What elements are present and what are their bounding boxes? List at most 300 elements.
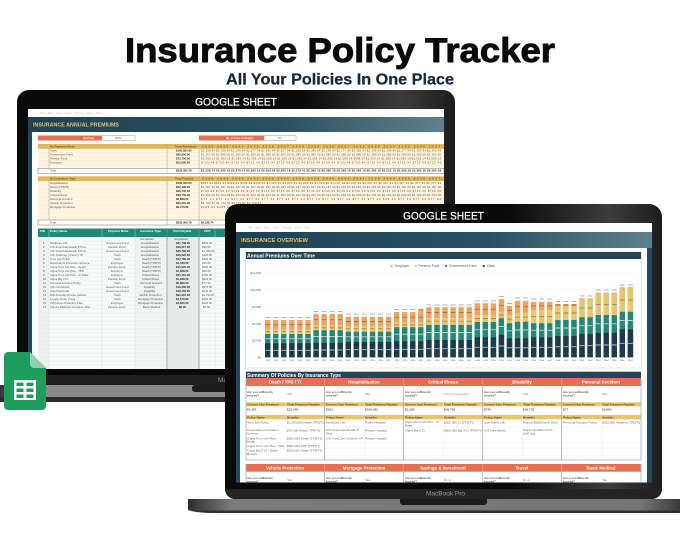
summary row one: policy list: $70,000 Death (TPD/TI) xyxy=(287,428,320,432)
table: policy list: $96.00 xyxy=(202,245,211,249)
summary row two: insured question: insured? xyxy=(563,480,575,484)
y axis labels: $12,500 xyxy=(251,271,261,275)
summary row two: insured question: insured? xyxy=(326,480,338,484)
summary row one: policy list: Cigna Term Life Plus - TPD xyxy=(247,444,285,448)
summary row one: policy list: Cigna Big 3 CI - Death xyxy=(247,448,278,452)
summary row one: premiums: $745 xyxy=(484,408,491,412)
table: by insurance type: Critical Illness xyxy=(50,193,68,197)
table: policy list: Government Fund xyxy=(106,289,129,293)
table: policy list: Government Fund xyxy=(106,249,129,253)
summary row one: insured question xyxy=(247,391,607,396)
summary row one: insured question: insured? xyxy=(484,394,496,398)
table: policy list: $1,080.00 xyxy=(202,249,215,253)
summary row one: premiums: $1,187 xyxy=(247,408,257,412)
start year control xyxy=(38,136,135,140)
x axis year labels: 2049 xyxy=(483,360,489,362)
table: policy list: S/N xyxy=(40,229,45,233)
table: by insurance type: Disability xyxy=(50,189,62,193)
summary row one: premiums: $100,036 xyxy=(365,408,378,412)
sheet header: INSURANCE ANNUAL PREMIUMS xyxy=(33,122,119,128)
summary row one: policy list: CIS SuperCareHealth P xyxy=(326,428,359,432)
summary row two: insured question: insured? xyxy=(484,480,496,484)
table: policy list: 11 xyxy=(43,281,46,285)
x axis year labels: 2046 xyxy=(459,360,464,362)
table: policy list: $77.44 xyxy=(202,281,211,285)
table: policy list: 15 xyxy=(43,297,47,301)
table: policy list: Critical Illness xyxy=(142,273,160,277)
chart legend: Pension Fund xyxy=(418,264,440,268)
summary row one: policy list: Term Life Policy xyxy=(247,420,269,424)
y axis labels: $2,500 xyxy=(252,338,261,342)
table: policy list: 3 xyxy=(43,249,45,253)
summary row one: policy list: $1,000,000 Death (TPD/TI) xyxy=(287,420,324,424)
start year control: 2022 xyxy=(115,136,122,140)
chart heading xyxy=(246,252,641,260)
table: policy list: Personal Accident xyxy=(140,281,163,285)
summary row one: policy list: Policy Name xyxy=(405,415,423,419)
summary row one: coral headers xyxy=(246,378,641,386)
table: policy list: Pension Fund xyxy=(108,277,126,281)
laptop: insurance overview sheet xyxy=(188,204,680,513)
summary row two: insured question: Are you sufficiently xyxy=(484,476,510,480)
x axis year labels: 2062 xyxy=(588,360,593,362)
table: policy list: Pension Fund xyxy=(108,245,126,249)
overview header xyxy=(236,232,652,483)
summary row one: policy list: CIS TotalCare (Citizen) YP xyxy=(326,436,363,440)
summary row one: policy list: Benefits xyxy=(287,415,299,419)
summary row one: coral headers: Hospitalisation xyxy=(348,380,380,385)
summary row one: policy list: Cigna Term Life Plus - xyxy=(247,436,277,440)
table: policy list: 2 xyxy=(43,245,45,249)
table: policy list: Basic Medical xyxy=(143,305,161,309)
table: by insurance type: Mortgage Protection xyxy=(50,205,76,209)
table: policy list: $4,289.00 xyxy=(176,277,189,281)
x axis year labels: 2064 xyxy=(604,360,609,362)
laptop bezel (rear) xyxy=(17,90,455,385)
summary row two: coral headers: Basic Medical xyxy=(586,465,616,470)
table: policy list: CIS Home Protection Plan xyxy=(50,301,83,305)
summary row one: policy list: Benefits xyxy=(365,415,377,419)
x axis year labels: 2022 xyxy=(265,360,271,362)
x axis year labels: 2032 xyxy=(346,360,352,362)
summary row one: policy list: Payout $600/month (Life) xyxy=(523,420,558,424)
x axis year labels: 2065 xyxy=(612,360,618,362)
table: policy list: 1 xyxy=(43,241,45,245)
table: policy list: Mortgage Protection xyxy=(138,297,164,301)
laptop brand (rear): MacBook Pro xyxy=(218,377,257,384)
summary row one: policy list xyxy=(246,415,641,456)
summary row two: insured question: Yes xyxy=(287,478,292,482)
table: by insurance type: $1,204.00 $1,204.00 $1,204.00 $1,204.00 $1,204.00 $1,204.00 $1,204.00 $1,204.00 $1,204.00 $1,204.00 $1,204.00 $1,204.00 $1,204.00 $1,204.00 $1,204.00 $1,204.00 xyxy=(201,193,441,197)
start year control: Start Year xyxy=(83,137,95,140)
table: policy list: Employer xyxy=(111,269,123,273)
bar data labels: dark bands xyxy=(265,300,633,332)
table: by insurance type: $2,890.00 xyxy=(176,197,189,201)
table: policy list: 5 xyxy=(43,257,45,261)
table: by payment mode: Government Fund xyxy=(50,152,73,156)
table: by payment mode: 2022 2023 2024 2025 2026 2027 2028 2029 2030 2031 2032 2033 2034 2035 2036 2037 xyxy=(202,144,440,148)
x axis year labels: 2047 xyxy=(467,360,472,362)
summary row two: coral headers: Savings & Investment xyxy=(420,465,466,470)
summary row two: insured question xyxy=(247,477,607,482)
summary row one: premiums: Total Premium Payable xyxy=(602,402,635,406)
summary row one: insured question: Are you sufficiently xyxy=(563,390,589,394)
x axis year labels: 2025 xyxy=(289,360,295,362)
chart legend xyxy=(390,264,495,268)
bezel label: Google Sheet: GOOGLE SHEET xyxy=(403,210,484,222)
table: by payment mode: $5,228.74 $5,360.18 $5,279.41 $5,360.18 $5,259.48 $5,260.18 $5,279.41 $5,360.18 $5,360.18 $5,360.18 $5,360.18 $5,360.18 $5,222.18 $5,360.18 $5,360.18 $5,360.18 xyxy=(201,169,441,173)
table: policy list: $12,780.00 xyxy=(176,257,190,261)
x axis year labels: 2023 xyxy=(273,360,279,362)
summary row one: premiums: $39,750 xyxy=(444,408,455,412)
summary row one: policy list: Benefits xyxy=(602,415,614,419)
table: policy list: Annualised xyxy=(174,237,188,241)
summary row one: coral headers: Personal Accident xyxy=(582,380,621,385)
x axis year labels: 2045 xyxy=(451,360,456,362)
summary row two: coral headers: Vehicle Protection xyxy=(266,465,304,470)
summary heading: Summary Of Policies By Insurance Type xyxy=(247,373,341,379)
table: by payment mode: Pension Fund xyxy=(50,156,68,160)
table: policy list: $0.00 xyxy=(179,305,186,309)
summary row one: insured question: Can be Increased xyxy=(444,392,469,396)
summary row one: policy list: MediCare Life xyxy=(326,420,346,424)
table: by insurance type: $745.00 $745.00 $745.00 $745.00 $745.00 $745.00 $745.00 $745.00 $745.00 $745.00 $745.00 $745.00 $745.00 $745.00 $745.00 $745.00 xyxy=(201,189,441,193)
table: by insurance type: $90,210.00 xyxy=(176,201,190,205)
x axis year labels: 2026 xyxy=(297,360,303,362)
table: policy list: $15,020.00 xyxy=(176,265,190,269)
summary row one: policy list: Dependants Protection xyxy=(247,428,279,432)
x axis year labels: 2053 xyxy=(515,360,521,362)
table: policy list: Payment Mode xyxy=(108,229,129,233)
table: by payment mode: $332,056.78 xyxy=(176,169,192,173)
summary row one: policy list: Policy Name xyxy=(563,415,581,419)
table: policy list: $4,800.00 xyxy=(176,301,189,305)
table: policy list: Disability xyxy=(144,285,156,289)
summary row one: insured question: insured? xyxy=(563,394,575,398)
bezel label: Google Sheet: GOOGLE SHEET xyxy=(195,96,277,108)
table: policy list: $370.00 xyxy=(202,289,213,293)
summary row one: policy list: Private Hospital xyxy=(365,436,387,440)
summary row one: insured question: Yes xyxy=(287,392,292,396)
x axis year labels: 2038 xyxy=(394,360,400,362)
laptop bezel (front) xyxy=(225,204,662,499)
x axis year labels: 2057 xyxy=(547,360,553,362)
summary row one: policy list: Benefits xyxy=(444,415,456,419)
table: by insurance type: $39,750.00 xyxy=(176,193,190,197)
summary row two: insured question: Are you sufficiently xyxy=(563,476,589,480)
table: policy list: 6 xyxy=(43,261,45,265)
bar totals xyxy=(265,285,633,318)
summary row one: policy list: $500,000 TPD (TPD/TI) xyxy=(287,444,320,448)
x axis year labels: 2058 xyxy=(555,360,561,362)
x axis year labels: 2029 xyxy=(322,360,327,362)
y axis labels: $5,000 xyxy=(252,322,261,326)
table: by payment mode: Employer xyxy=(50,160,62,164)
summary row one: premiums: Current Year Premium xyxy=(563,402,595,406)
x axis year labels: 2051 xyxy=(499,360,505,362)
table: by insurance type: Total Payable xyxy=(175,177,194,181)
chart legend: Government Fund xyxy=(449,264,476,268)
table: by insurance type: Vehicle Protection xyxy=(50,201,73,205)
x axis year labels: 2042 xyxy=(426,360,432,362)
table: policy list: CareShield Life xyxy=(50,289,70,293)
sheet body panel xyxy=(32,132,444,369)
overview header: INSURANCE OVERVIEW xyxy=(241,238,309,244)
table: by payment mode: $73,750.50 xyxy=(176,156,190,160)
table: policy list: Death (TPD/TI) xyxy=(142,265,161,269)
x axis year labels: 2041 xyxy=(418,360,424,362)
summary row one: premiums: Total Premium Payable xyxy=(287,402,320,406)
summary row one: insured question: insured? xyxy=(326,394,338,398)
table: policy list: Hospitalisation xyxy=(141,245,160,249)
table: policy list: $1,608.00 xyxy=(176,269,189,273)
summary row one: premiums: Total Premium Payable xyxy=(523,402,556,406)
years display control xyxy=(199,136,296,140)
summary heading xyxy=(246,372,641,378)
table: policy list: Insurance Type xyxy=(140,229,161,233)
summary row one: policy list: Policy Name xyxy=(484,415,502,419)
table: by insurance type: $100,036.00 xyxy=(176,181,192,185)
table: policy list: MediCare Life xyxy=(50,241,68,245)
summary row one: policy list: Rider xyxy=(405,424,412,428)
summary row two: insured question: insured? xyxy=(247,480,259,484)
x axis year labels: 2054 xyxy=(523,360,529,362)
table: by insurance type: Death (TPD/TI) xyxy=(50,185,69,189)
table: policy list: $195.00 xyxy=(202,253,213,257)
table: policy list: Cigna Term Life Plus - Death xyxy=(50,265,86,269)
table: by payment mode: By Payment Mode xyxy=(50,144,75,148)
summary row one: coral headers: Death / TPD / TI xyxy=(269,380,301,385)
summary row one: premiums: Current Year Premium xyxy=(326,402,358,406)
table: policy list: 12 xyxy=(43,285,47,289)
x axis year labels: 2037 xyxy=(386,360,392,362)
years display control: 16 xyxy=(278,136,282,140)
summary row one: insured question: Are you sufficiently xyxy=(405,390,431,394)
x axis year labels: 2061 xyxy=(580,360,585,362)
table: policy list: Personal Accident Policy xyxy=(50,281,81,285)
summary row two: insured question: N / A xyxy=(444,478,452,482)
table: policy list: Death (TPD/TI) xyxy=(142,257,161,261)
summary row one: premiums: $2,890 xyxy=(602,408,612,412)
table: by payment mode xyxy=(38,144,444,173)
panel: annual premiums chart xyxy=(246,252,642,368)
laptop: annual premiums sheet xyxy=(0,90,455,402)
sheet header xyxy=(28,117,444,369)
table: policy list: 8 xyxy=(43,269,45,273)
table: by insurance type: $332,056.78 xyxy=(176,220,192,224)
table: policy list: $1,722.87 xyxy=(202,293,215,297)
table: policy list: $30.00 xyxy=(202,261,211,265)
summary row one: insured question: Yes xyxy=(602,392,607,396)
summary row one: coral headers: Critical Illness xyxy=(428,380,458,385)
table: policy list: $31,708.00 xyxy=(176,241,190,245)
spreadsheet screen (front) xyxy=(236,223,652,484)
summary row one: policy list: Benefit xyxy=(247,452,257,456)
x axis year labels: 2059 xyxy=(563,360,569,362)
title: Insurance Policy Tracker xyxy=(125,32,555,70)
summary row one: coral headers: Disability xyxy=(512,380,532,385)
x axis year labels: 2048 xyxy=(475,360,481,362)
x axis year labels: 2060 xyxy=(572,360,577,362)
summary row two: insured question: Yes xyxy=(365,478,370,482)
table: by payment mode: Total Premiums xyxy=(175,144,197,148)
summary row one: policy list: $200,000 Accident (TPD/TI) xyxy=(602,420,640,424)
summary row two: insured question: Are you sufficiently xyxy=(247,476,273,480)
menu bar: File Edit View Insert Format Data Tools xyxy=(40,111,103,115)
stacked bars: cash xyxy=(268,329,630,357)
table: by insurance type: Hospitalisation xyxy=(50,181,69,185)
x axis year labels: 2039 xyxy=(402,360,408,362)
table: policy list: Employer xyxy=(111,273,123,277)
laptop base (front) xyxy=(188,497,680,513)
table: policy list: Death (TPD/TI) xyxy=(142,261,161,265)
stacked bars: employer xyxy=(268,287,630,357)
table: policy list: Mortgage Protection xyxy=(138,301,164,305)
table: by payment mode: $1,055.14 $1,055.14 $1,055.14 $1,055.14 $1,055.14 $1,055.14 $1,055.14 $1,055.14 $1,055.14 $1,055.14 $998.14 $1,055.14 $1,055.14 $1,055.14 $1,055.14 $1,055.14 xyxy=(201,156,441,160)
table: policy list: Cigna Term Life Plus - CI Rider xyxy=(50,273,89,277)
table: policy list: Cash xyxy=(114,257,121,261)
table: by insurance type: $9,470.80 xyxy=(176,205,189,209)
summary row two: coral headers xyxy=(246,464,641,472)
chart legend: Employer xyxy=(395,264,410,268)
table: policy list: Cash xyxy=(114,293,121,297)
summary row one: policy list: Benefits xyxy=(523,415,535,419)
table: policy list: CIS CareShield xyxy=(50,285,70,289)
x axis year labels: 2024 xyxy=(281,360,287,362)
summary row one: insured question: Are you sufficiently xyxy=(247,390,273,394)
summary row one: premiums: Current Year Premium xyxy=(484,402,516,406)
table: policy list: $353.94 xyxy=(202,241,213,245)
summary row one: policy list: $300,000 Big 3 CI (TPD/TI) xyxy=(444,428,482,432)
summary row one: premiums xyxy=(246,402,641,412)
table: policy list: 16 xyxy=(43,301,47,305)
icon: Google Sheets xyxy=(4,352,46,410)
table: policy list: $49,317.00 xyxy=(176,245,190,249)
table: policy list: CIS TotalCare (Citizen) YP xyxy=(50,253,83,257)
summary row one: insured question: Are you sufficiently xyxy=(326,390,352,394)
summary row two: coral headers: Mortgage Protection xyxy=(343,465,386,470)
summary row one: premiums: $181 xyxy=(326,408,333,412)
summary row one: policy list: Payout $1,000/month xyxy=(523,428,553,432)
table: by insurance type: Personal Accident xyxy=(50,197,73,201)
table: policy list: $120.00 xyxy=(202,301,213,305)
table: policy list: 7 xyxy=(43,265,45,269)
bar data labels: light bands xyxy=(265,320,633,350)
summary row one: policy list: $500,000 Death (TPD/TI) xyxy=(287,436,322,440)
summary row one: premiums: $36,735 xyxy=(523,408,534,412)
table: policy list: $500.00 xyxy=(202,265,213,269)
summary row one: premiums: $77 xyxy=(563,408,568,412)
table: policy list: Pension Fund xyxy=(108,305,126,309)
table: policy list: Hospitalisation xyxy=(141,241,160,245)
x axis year labels: 2036 xyxy=(378,360,384,362)
table: by payment mode: Total xyxy=(50,169,56,173)
table: policy list: $46.00 xyxy=(202,269,211,273)
subtitle: All Your Policies In One Place xyxy=(226,72,454,88)
summary row one: premiums: Total Premium Payable xyxy=(444,402,477,406)
chart heading: Annual Premiums Over Time xyxy=(247,254,315,260)
table: policy list: CIS SuperCareHealth P Plus xyxy=(50,249,86,253)
table: policy list: 2022 xyxy=(204,229,211,233)
table: by insurance type: $285.00 $285.00 xyxy=(201,205,231,209)
table: by insurance type: $22,499.00 xyxy=(176,185,190,189)
summary row one: policy list: Policy Name xyxy=(326,415,344,419)
table: policy list: $2,890.00 xyxy=(176,281,189,285)
table: policy list: $35,461.00 xyxy=(176,273,190,277)
x axis year labels xyxy=(265,360,633,361)
summary row one: policy list: Cigna Term Life Plus - CI xyxy=(405,420,439,424)
table: policy list: Government Fund xyxy=(106,285,129,289)
table: policy list: Cigna Big 3 CI xyxy=(50,277,68,281)
table: by insurance type: $1,722.87 $1,722.87 $1,722.87 $1,722.87 xyxy=(201,201,261,205)
summary row one: policy list: Scheme xyxy=(247,432,259,436)
table: policy list: $0.00 xyxy=(203,305,210,309)
menu bar xyxy=(236,223,652,232)
summary row one: policy list: CareShield Life xyxy=(484,420,505,424)
menu bar: File Edit View Insert Format Data Tools xyxy=(248,226,311,230)
table: policy list: Annualised xyxy=(140,237,154,241)
table: by insurance type: Total xyxy=(50,220,56,224)
summary row one: insured question: Are you sufficiently xyxy=(484,390,510,394)
table: policy list: 14 xyxy=(43,293,47,297)
x axis year labels: 2067 xyxy=(628,360,634,362)
table: policy list: 10 xyxy=(43,277,47,281)
table: policy list: Hospitalisation xyxy=(141,253,160,257)
table: policy list: CIS SuperCareHealth P Plus xyxy=(50,245,86,249)
x axis year labels: 2044 xyxy=(443,360,448,362)
table: by payment mode: $96,850.00 xyxy=(176,152,190,156)
summary row one: premiums: Current Year Premium xyxy=(247,402,279,406)
table: policy list: Vehicle Protection xyxy=(139,293,162,297)
summary row one: policy list: CIS CareShield xyxy=(484,428,506,432)
table: policy list: Term Life Policy xyxy=(50,257,70,261)
table: by payment mode: $725.44 $725.44 $725.44 $725.44 $725.44 $725.44 $725.44 $725.44 $725.44 $725.44 $725.44 $725.44 $725.44 $725.44 $725.44 $725.44 xyxy=(201,160,441,164)
summary row two: insured question: insured? xyxy=(405,480,417,484)
table: by insurance type: $353.94 $449.94 $449.94 $449.94 $449.94 $1,029.94 $1,029.94 $1,029.94 $1,029.94 $1,247.94 $1,247.94 $1,347.94 $1,347.94 $1,347.94 $1,377.94 $1,377.94 xyxy=(201,181,441,185)
x axis year labels: 2033 xyxy=(354,360,360,362)
menu bar xyxy=(28,109,444,117)
summary row two: insured question: Are you sufficiently xyxy=(405,476,431,480)
years display control: No. of Years to Display xyxy=(226,137,254,140)
table: policy list: $424.00 xyxy=(202,277,213,281)
table: policy list: Cigna's Platinum Insurance Plan xyxy=(50,305,91,309)
summary row one: premiums: $22,499 xyxy=(287,408,298,412)
table: policy list: 4 xyxy=(43,253,45,257)
table: policy list: Dependants Protection Scheme xyxy=(50,261,90,265)
table: policy list: Hospitalisation xyxy=(141,249,160,253)
table: policy list: $18,280.00 xyxy=(176,285,190,289)
summary row two: insured question: Yes xyxy=(602,478,607,482)
table: policy list: 17 xyxy=(43,305,47,309)
table: by insurance type: By Insurance Type xyxy=(50,177,76,181)
table: policy list: Cigna Term Life Plus - TPD xyxy=(50,269,84,273)
summary row one: policy list: Cigna Big 3 CI xyxy=(405,428,425,432)
table: by payment mode: $53,650.50 xyxy=(176,160,190,164)
table: by insurance type xyxy=(38,176,444,225)
table: policy list: $18,455.00 xyxy=(176,289,190,293)
table: policy list: MSI Autoplan Private Vehicle xyxy=(50,293,86,297)
x axis year labels: 2040 xyxy=(410,360,416,362)
summary row one: insured question: insured? xyxy=(405,394,417,398)
x axis year labels: 2063 xyxy=(596,360,601,362)
x axis year labels: 2066 xyxy=(620,360,626,362)
summary row one: premiums: Total Premium Payable xyxy=(365,402,398,406)
summary row one: insured question: Yes xyxy=(523,392,528,396)
table: policy list: $165.00 xyxy=(202,297,213,301)
table: policy list: Total Payable xyxy=(173,229,192,233)
table: by payment mode: $160,835.80 xyxy=(176,148,192,152)
x axis year labels: 2031 xyxy=(338,360,343,362)
